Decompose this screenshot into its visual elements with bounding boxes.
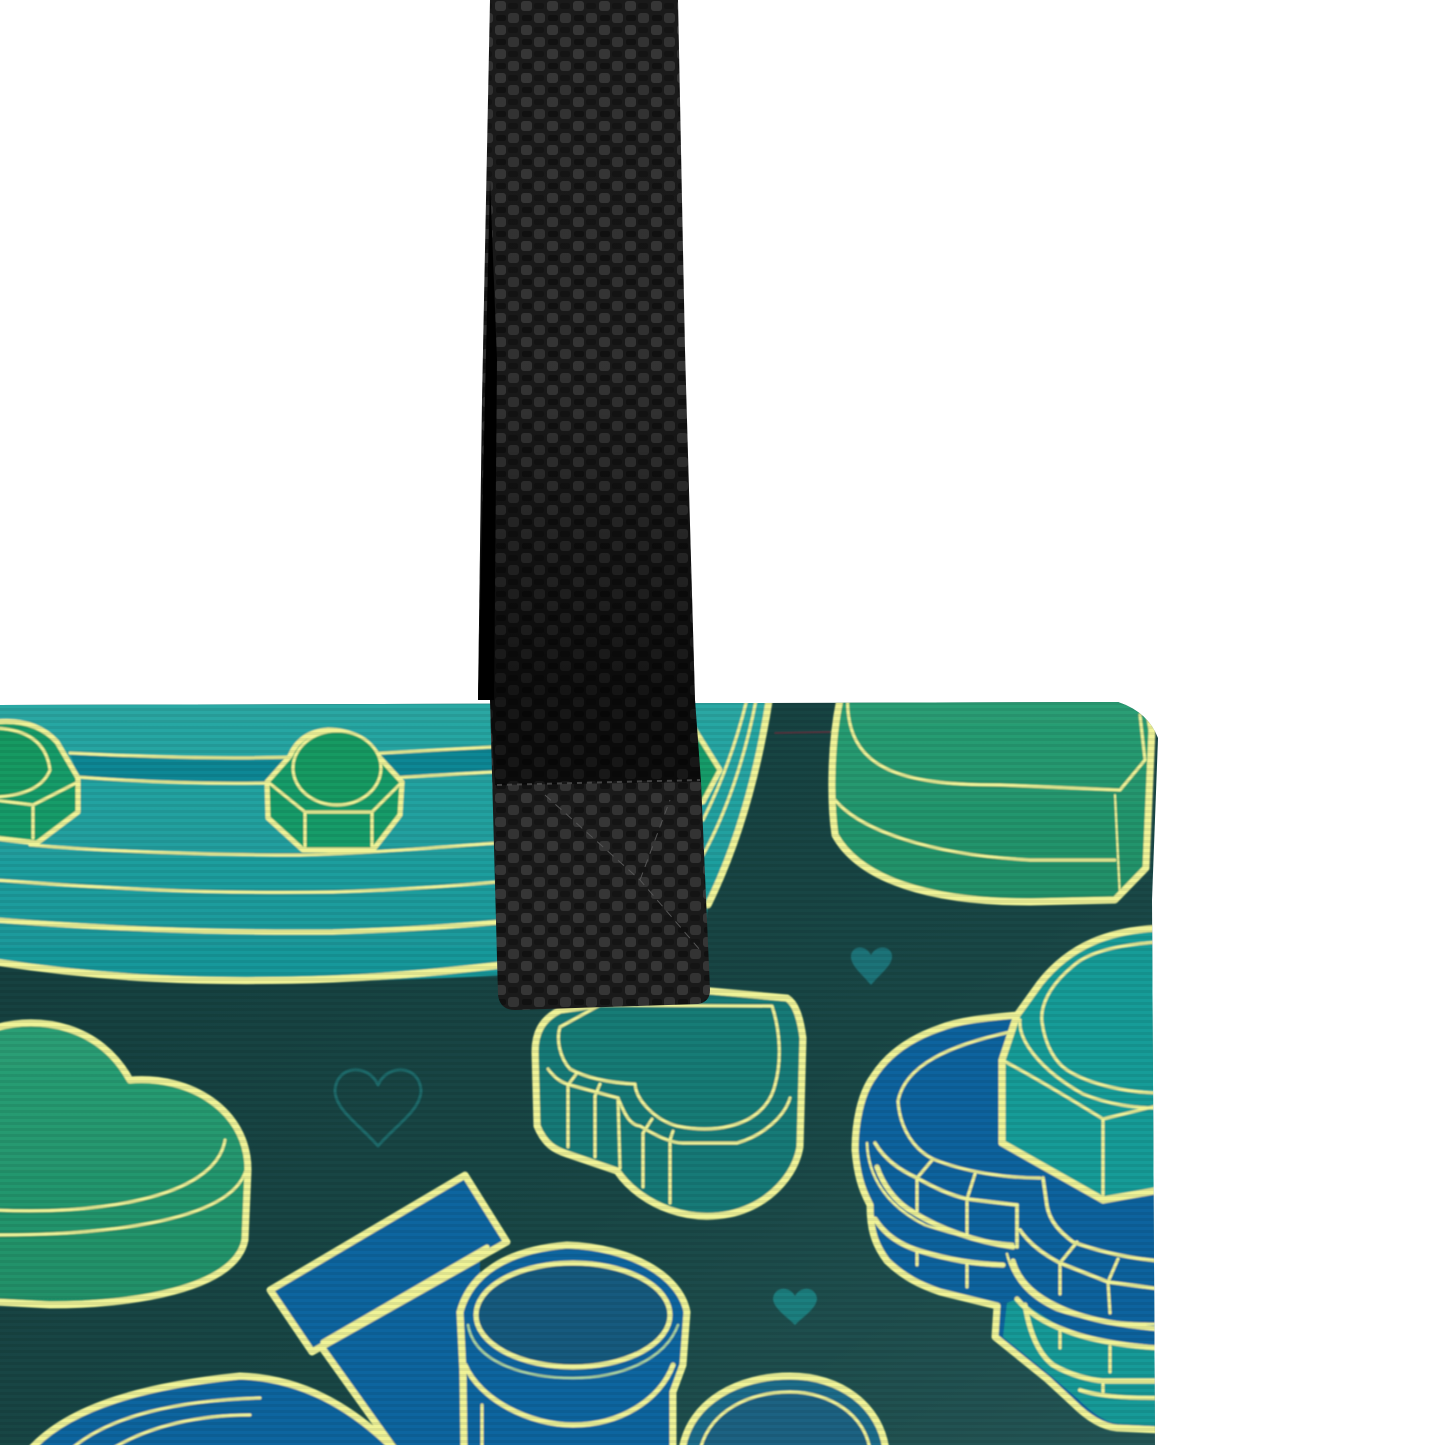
blue cylinder [460, 1245, 687, 1445]
right stacked blue disc [855, 1000, 1160, 1430]
blue stem and rectangle [270, 1175, 507, 1445]
blue ring bottom left [30, 1376, 395, 1445]
teal nut on right stack [1002, 928, 1160, 1200]
bag body [0, 702, 1158, 1445]
teal lower layer on stack [1003, 1299, 1160, 1426]
small heart teal bottom [773, 1289, 817, 1325]
nut centre [267, 730, 402, 850]
blue cylinder bottom centre [682, 1376, 886, 1445]
fabric texture [0, 702, 1158, 1445]
printed pattern [0, 690, 1160, 1445]
print flaw line [775, 732, 830, 733]
handle strap stitched end [490, 700, 710, 1010]
teal heart block centre [535, 990, 803, 1216]
nut behind handle [697, 726, 724, 806]
handle strap upper [478, 0, 695, 700]
small outline heart [335, 1070, 421, 1146]
green rounded block top right [832, 690, 1152, 902]
small heart teal top [851, 948, 892, 985]
teal curved band [0, 695, 770, 981]
left green cloud heart [0, 1023, 248, 1305]
nut left [0, 721, 78, 843]
